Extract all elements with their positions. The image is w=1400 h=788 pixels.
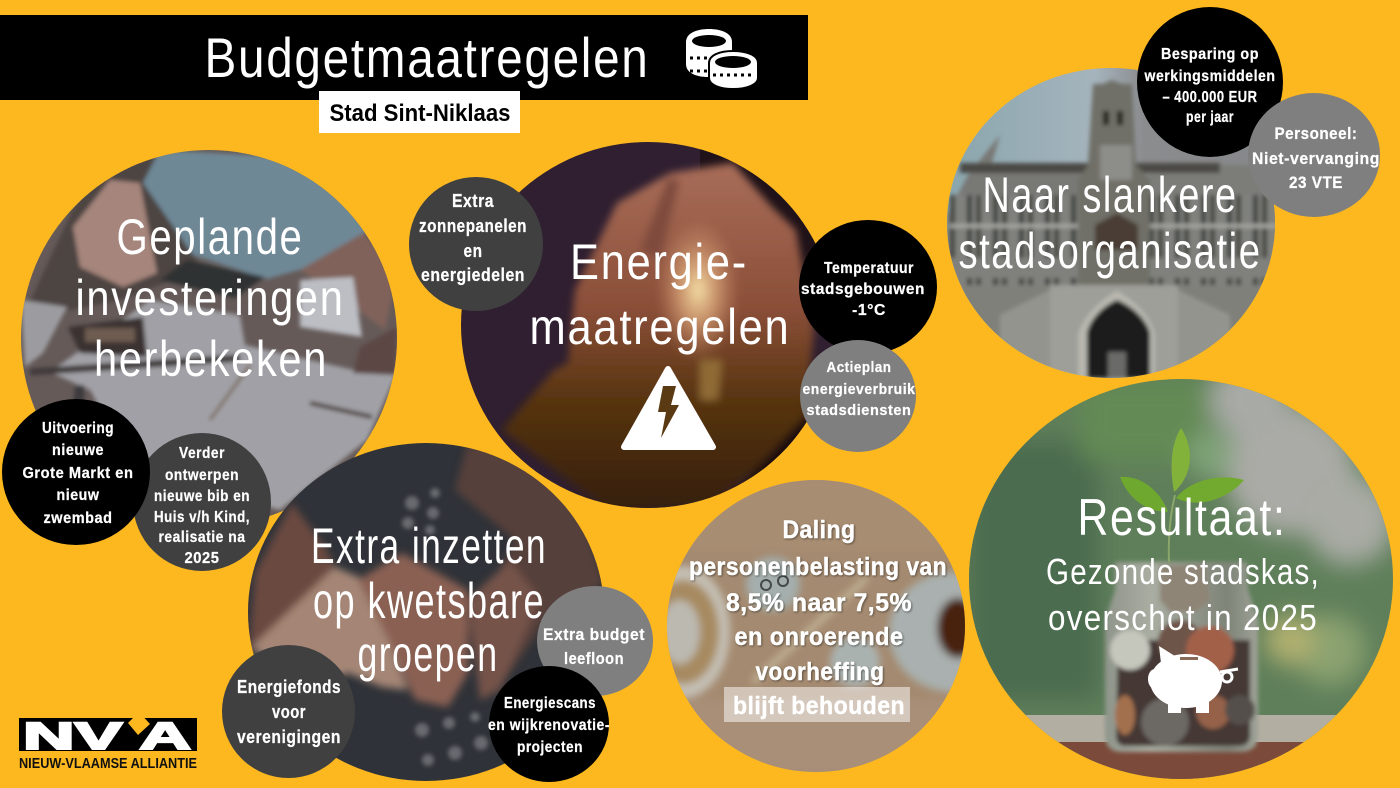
panel: slankere stadsorganisatie (947, 68, 1278, 378)
bubble: extra budget (537, 586, 653, 696)
bubble: zonnepanelen: energiedelen (421, 265, 525, 285)
bubble: uitvoering: Grote Markt en (22, 465, 134, 482)
text block: voorheffing (756, 658, 884, 686)
subheading (1046, 551, 1320, 638)
bubble: personeel: Niet-vervanging (1252, 149, 1380, 168)
heading: Energie- (570, 234, 748, 290)
bubble: uitvoering: nieuwe (52, 442, 104, 459)
icon: piggy bank (1148, 646, 1238, 713)
bubble: uitvoering: Uitvoering (42, 420, 114, 437)
icon: high voltage triangle (624, 369, 713, 447)
bubble: actieplan: stadsdiensten (806, 402, 912, 419)
bubble: personeel: 23 VTE (1289, 173, 1343, 192)
bubble: energiescans: projecten (517, 739, 583, 756)
bubble: energiefonds (222, 645, 355, 778)
heading: Resultaat: (1078, 489, 1286, 547)
bubble: verder ontwerpen: Verder (179, 445, 225, 462)
bubble: extra budget: Extra budget (543, 625, 645, 644)
subtitle box (319, 91, 520, 133)
title banner (0, 15, 808, 100)
bubble: actieplan (800, 340, 916, 452)
bubble: zonnepanelen (409, 177, 543, 311)
panel: daling belastingen (667, 480, 965, 772)
title: Budgetmaatregelen (204, 26, 650, 89)
heading: stadsorganisatie (958, 223, 1262, 279)
heading: Naar slankere (982, 167, 1238, 223)
bubble: energiefonds: Energiefonds (237, 677, 341, 697)
bubble: energiescans: en wijkrenovatie- (488, 717, 610, 734)
bubble: verder ontwerpen: ontwerpen (165, 467, 239, 484)
heading (311, 518, 547, 682)
bubble: uitvoering (2, 399, 150, 545)
bubble: temperatuur: Temperatuur (824, 260, 914, 277)
bubble: energiefonds: verenigingen (237, 727, 341, 747)
text block (689, 516, 947, 686)
logo: NV-A (19, 712, 197, 772)
heading: op kwetsbare (313, 573, 545, 629)
panel: kwetsbare groepen (248, 443, 606, 781)
bubble: verder ontwerpen: nieuwe bib en (154, 488, 250, 505)
subtitle box: Stad Sint-Niklaas (330, 100, 510, 127)
bubble: besparing: – 400.000 EUR (1162, 89, 1258, 106)
highlighted text: blijft behouden (733, 692, 905, 720)
subheading: Gezonde stadskas, (1046, 551, 1320, 592)
heading: Extra inzetten (311, 518, 547, 574)
bubble: personeel (1248, 93, 1380, 217)
bubble: besparing: werkingsmiddelen (1144, 68, 1276, 85)
subheading: overschot in 2025 (1048, 597, 1318, 638)
heading: herbekeken (94, 331, 328, 387)
bubble: besparing: Besparing op (1161, 46, 1259, 63)
bubble: actieplan: Actieplan (826, 359, 892, 376)
bubble: verder ontwerpen: Huis v/h Kind, (154, 509, 250, 526)
heading: investeringen (76, 270, 344, 326)
bubble: verder ontwerpen: 2025 (184, 550, 220, 567)
panel: geplande investeringen (21, 130, 397, 526)
logo: NV-A: NV A (23, 716, 191, 758)
heading: Geplande (116, 209, 304, 265)
icon: coins (686, 29, 758, 89)
bubble: zonnepanelen: en (464, 241, 482, 261)
bubble: verder ontwerpen: realisatie na (158, 529, 246, 546)
bubble: temperatuur (799, 220, 937, 354)
text block: 8,5% naar 7,5% (726, 589, 912, 617)
bubble: verder ontwerpen (133, 433, 271, 571)
bubble: uitvoering: nieuw (56, 487, 100, 504)
bubble: zonnepanelen: Extra (452, 191, 494, 211)
text block: personenbelasting van (689, 553, 947, 581)
panel: energiemaatregelen (461, 139, 840, 512)
bubble: besparing (1137, 7, 1283, 157)
text block: Daling (782, 516, 856, 544)
text block: en onroerende (734, 623, 904, 651)
bubble: uitvoering: zwembad (44, 510, 112, 527)
logo: NV-A: NIEUW-VLAAMSE ALLIANTIE (19, 755, 197, 772)
bubble: besparing: per jaar (1186, 109, 1234, 126)
heading (958, 167, 1262, 279)
bubble: energiescans: Energiescans (504, 695, 596, 712)
bubble: energiefonds: voor (272, 702, 306, 722)
bubble: actieplan: energieverbruik (802, 381, 916, 398)
heading: maatregelen (530, 299, 790, 355)
heading (530, 234, 790, 355)
bubble: zonnepanelen: zonnepanelen (419, 216, 527, 236)
bubble: temperatuur: stadsgebouwen (801, 281, 925, 298)
bubble: energiescans (488, 666, 610, 782)
bubble: personeel: Personeel: (1274, 124, 1358, 143)
heading: groepen (358, 626, 498, 682)
bubble: temperatuur: -1°C (852, 302, 886, 319)
bubble: extra budget: leefloon (564, 649, 624, 668)
panel: resultaat (969, 360, 1395, 782)
heading (76, 209, 344, 387)
